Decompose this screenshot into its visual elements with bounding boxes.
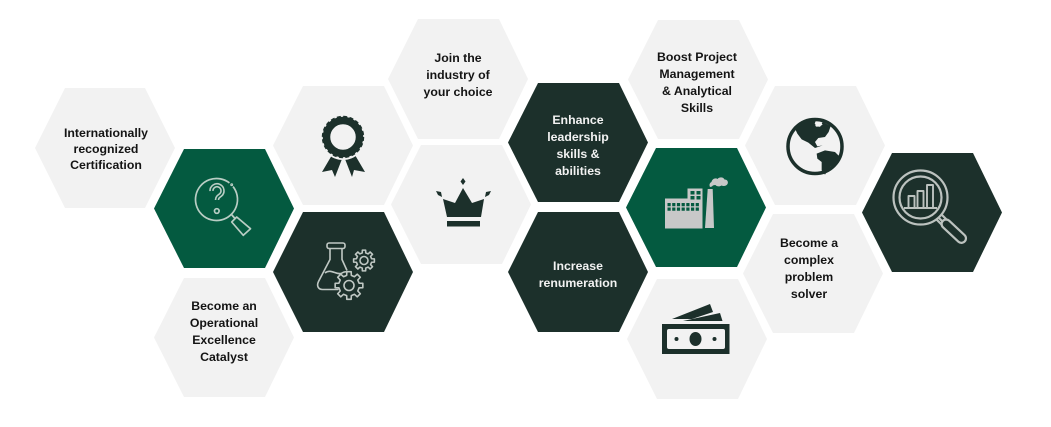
hexagon: Internationally recognized Certification xyxy=(35,88,175,208)
hexagon: Become a complex problem solver: complex xyxy=(784,253,834,267)
hexagon: money icon xyxy=(627,279,767,399)
icon: chart magnifier xyxy=(894,170,968,245)
hexagon: Internationally recognized Certification: Internationally xyxy=(64,126,148,140)
hexagon: Increase renumeration xyxy=(508,212,648,332)
hexagon: Enhance leadership skills & abilities: abilities xyxy=(555,164,601,178)
hexagon: Become an Operational Excellence Catalyst xyxy=(154,278,294,397)
hexagon: globe icon xyxy=(745,86,885,205)
hexagon: Join the industry of your choice: Join the xyxy=(434,51,482,65)
hexagon: Boost Project Management & Analytical Skills: Boost Project xyxy=(657,50,737,64)
icon: factory xyxy=(665,177,728,228)
hexagon: flask and gears icon xyxy=(273,212,413,332)
hexagon: Enhance leadership skills & abilities: Enhance xyxy=(552,113,604,127)
hexagon: question magnifier icon xyxy=(154,149,294,268)
hexagon: Enhance leadership skills & abilities xyxy=(508,83,648,202)
hexagon: Join the industry of your choice: your choice xyxy=(423,85,493,99)
hexagon: Internationally recognized Certification: Certification xyxy=(70,158,142,172)
hexagon: Boost Project Management & Analytical Skills: Skills xyxy=(681,101,713,115)
hexagon: Join the industry of your choice xyxy=(388,19,528,139)
hexagon: analytics magnifier icon xyxy=(862,153,1002,272)
hexagon: Boost Project Management & Analytical Skills: Management xyxy=(659,67,735,81)
icon: banknotes xyxy=(662,304,730,354)
hexagon: Join the industry of your choice: industry of xyxy=(426,68,491,82)
hexagon: Internationally recognized Certification: recognized xyxy=(74,142,138,156)
hexagon: Become a complex problem solver: problem xyxy=(785,270,833,284)
icon: globe xyxy=(788,119,842,175)
icon: question magnifier xyxy=(196,178,250,235)
icon: crown xyxy=(436,178,491,226)
hexagon: Become an Operational Excellence Catalyst: Excellence xyxy=(192,333,256,347)
hexagon: Enhance leadership skills & abilities: leadership xyxy=(547,130,609,144)
hexagon: factory icon xyxy=(626,148,766,267)
hexagon: Become an Operational Excellence Catalyst: Catalyst xyxy=(200,350,248,364)
icon: award rosette xyxy=(320,114,366,177)
hexagon: Become an Operational Excellence Catalyst: Operational xyxy=(190,316,258,330)
hexagon: Become a complex problem solver xyxy=(743,214,883,333)
hexagon: award icon xyxy=(273,86,413,205)
icon: flask and gears xyxy=(318,243,374,299)
hexagon: Enhance leadership skills & abilities: skills & xyxy=(556,147,600,161)
hexagon: Increase renumeration: renumeration xyxy=(539,276,617,290)
hexagon: crown icon xyxy=(391,145,531,264)
hexagon: Boost Project Management & Analytical Skills xyxy=(628,20,768,139)
hexagon: Increase renumeration: Increase xyxy=(553,259,603,273)
hexagon: Become an Operational Excellence Catalyst: Become an xyxy=(191,299,257,313)
hexagon: Boost Project Management & Analytical Skills: & Analytical xyxy=(662,84,732,98)
hexagon: Become a complex problem solver: solver xyxy=(791,287,827,301)
hexagon: Become a complex problem solver: Become a xyxy=(780,236,838,250)
